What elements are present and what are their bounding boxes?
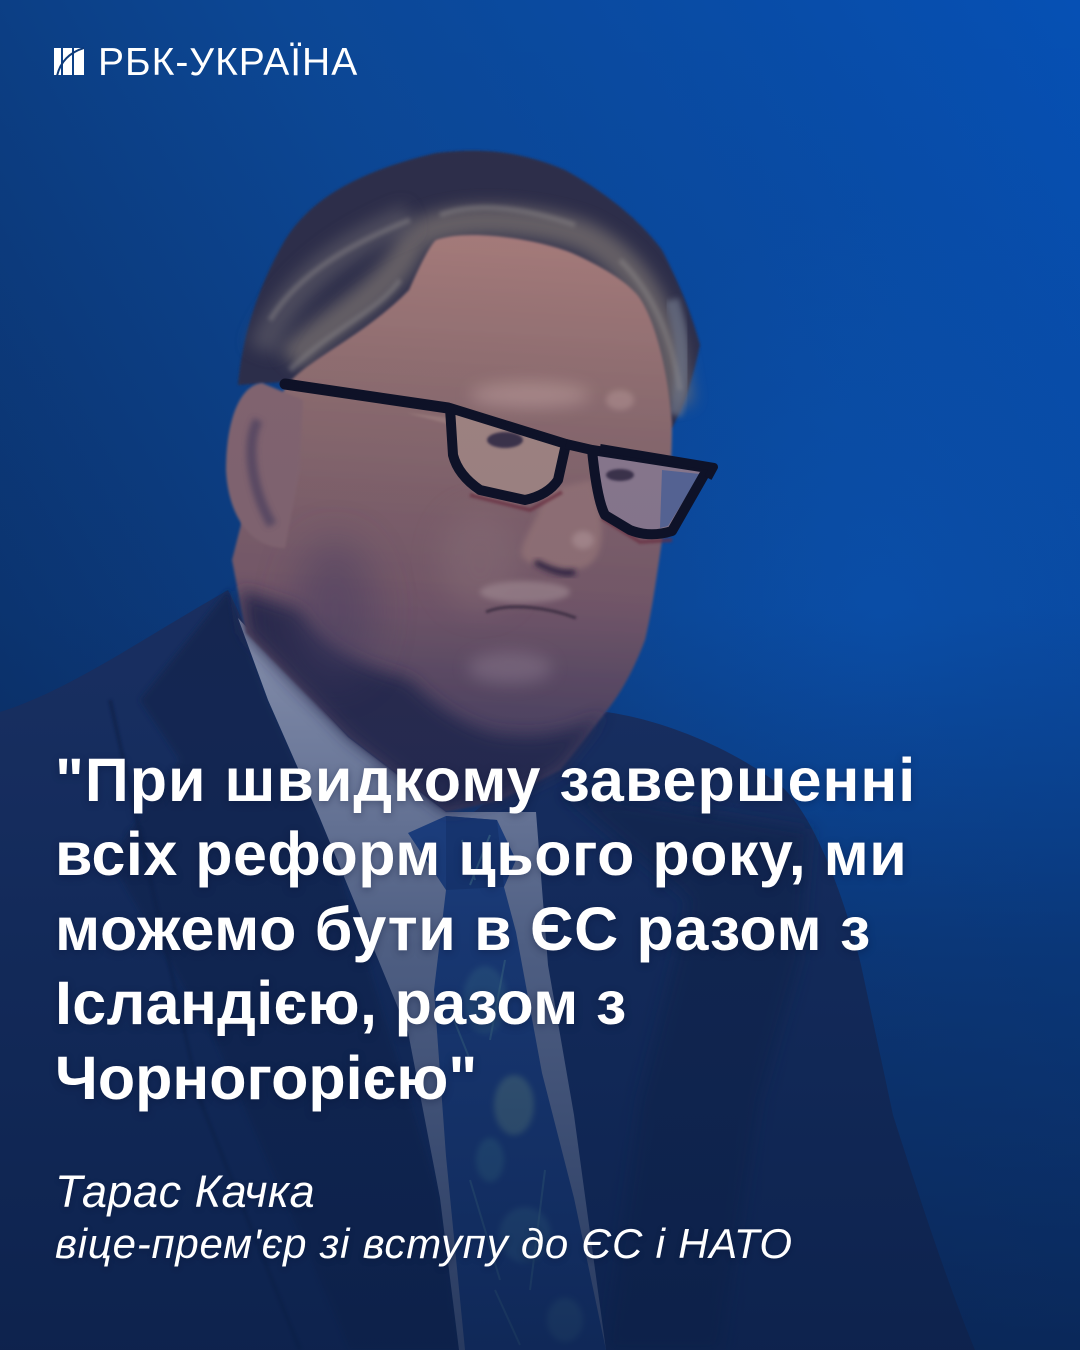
neck and face xyxy=(232,235,672,812)
ear xyxy=(226,383,303,548)
nose and mouth xyxy=(521,480,602,570)
tie xyxy=(408,816,606,1350)
quote heading: можемо бути в ЄС разом з xyxy=(55,895,871,963)
speaker attribution: Тарас Качка xyxy=(55,1166,315,1217)
facial shading xyxy=(240,382,634,812)
speaker attribution xyxy=(55,1166,793,1267)
logo wordmark: РБК-УКРАЇНА xyxy=(98,41,358,84)
quote heading: всіх реформ цього року, ми xyxy=(55,820,907,888)
glasses xyxy=(285,384,714,542)
jacket lapel shading xyxy=(110,590,459,1350)
logo mark xyxy=(54,47,84,76)
quote heading: "При швидкому завершенні xyxy=(55,746,916,814)
shirt xyxy=(238,618,606,1350)
hair highlights xyxy=(262,208,682,415)
hair xyxy=(238,151,700,428)
quote heading xyxy=(55,746,916,1112)
speaker attribution: віце-прем'єр зі вступу до ЄС і НАТО xyxy=(55,1220,793,1267)
quote heading: Чорногорією" xyxy=(55,1044,477,1112)
quote heading: Ісландією, разом з xyxy=(55,969,627,1037)
jacket xyxy=(0,590,975,1350)
logo: РБК-Україна xyxy=(54,41,358,84)
